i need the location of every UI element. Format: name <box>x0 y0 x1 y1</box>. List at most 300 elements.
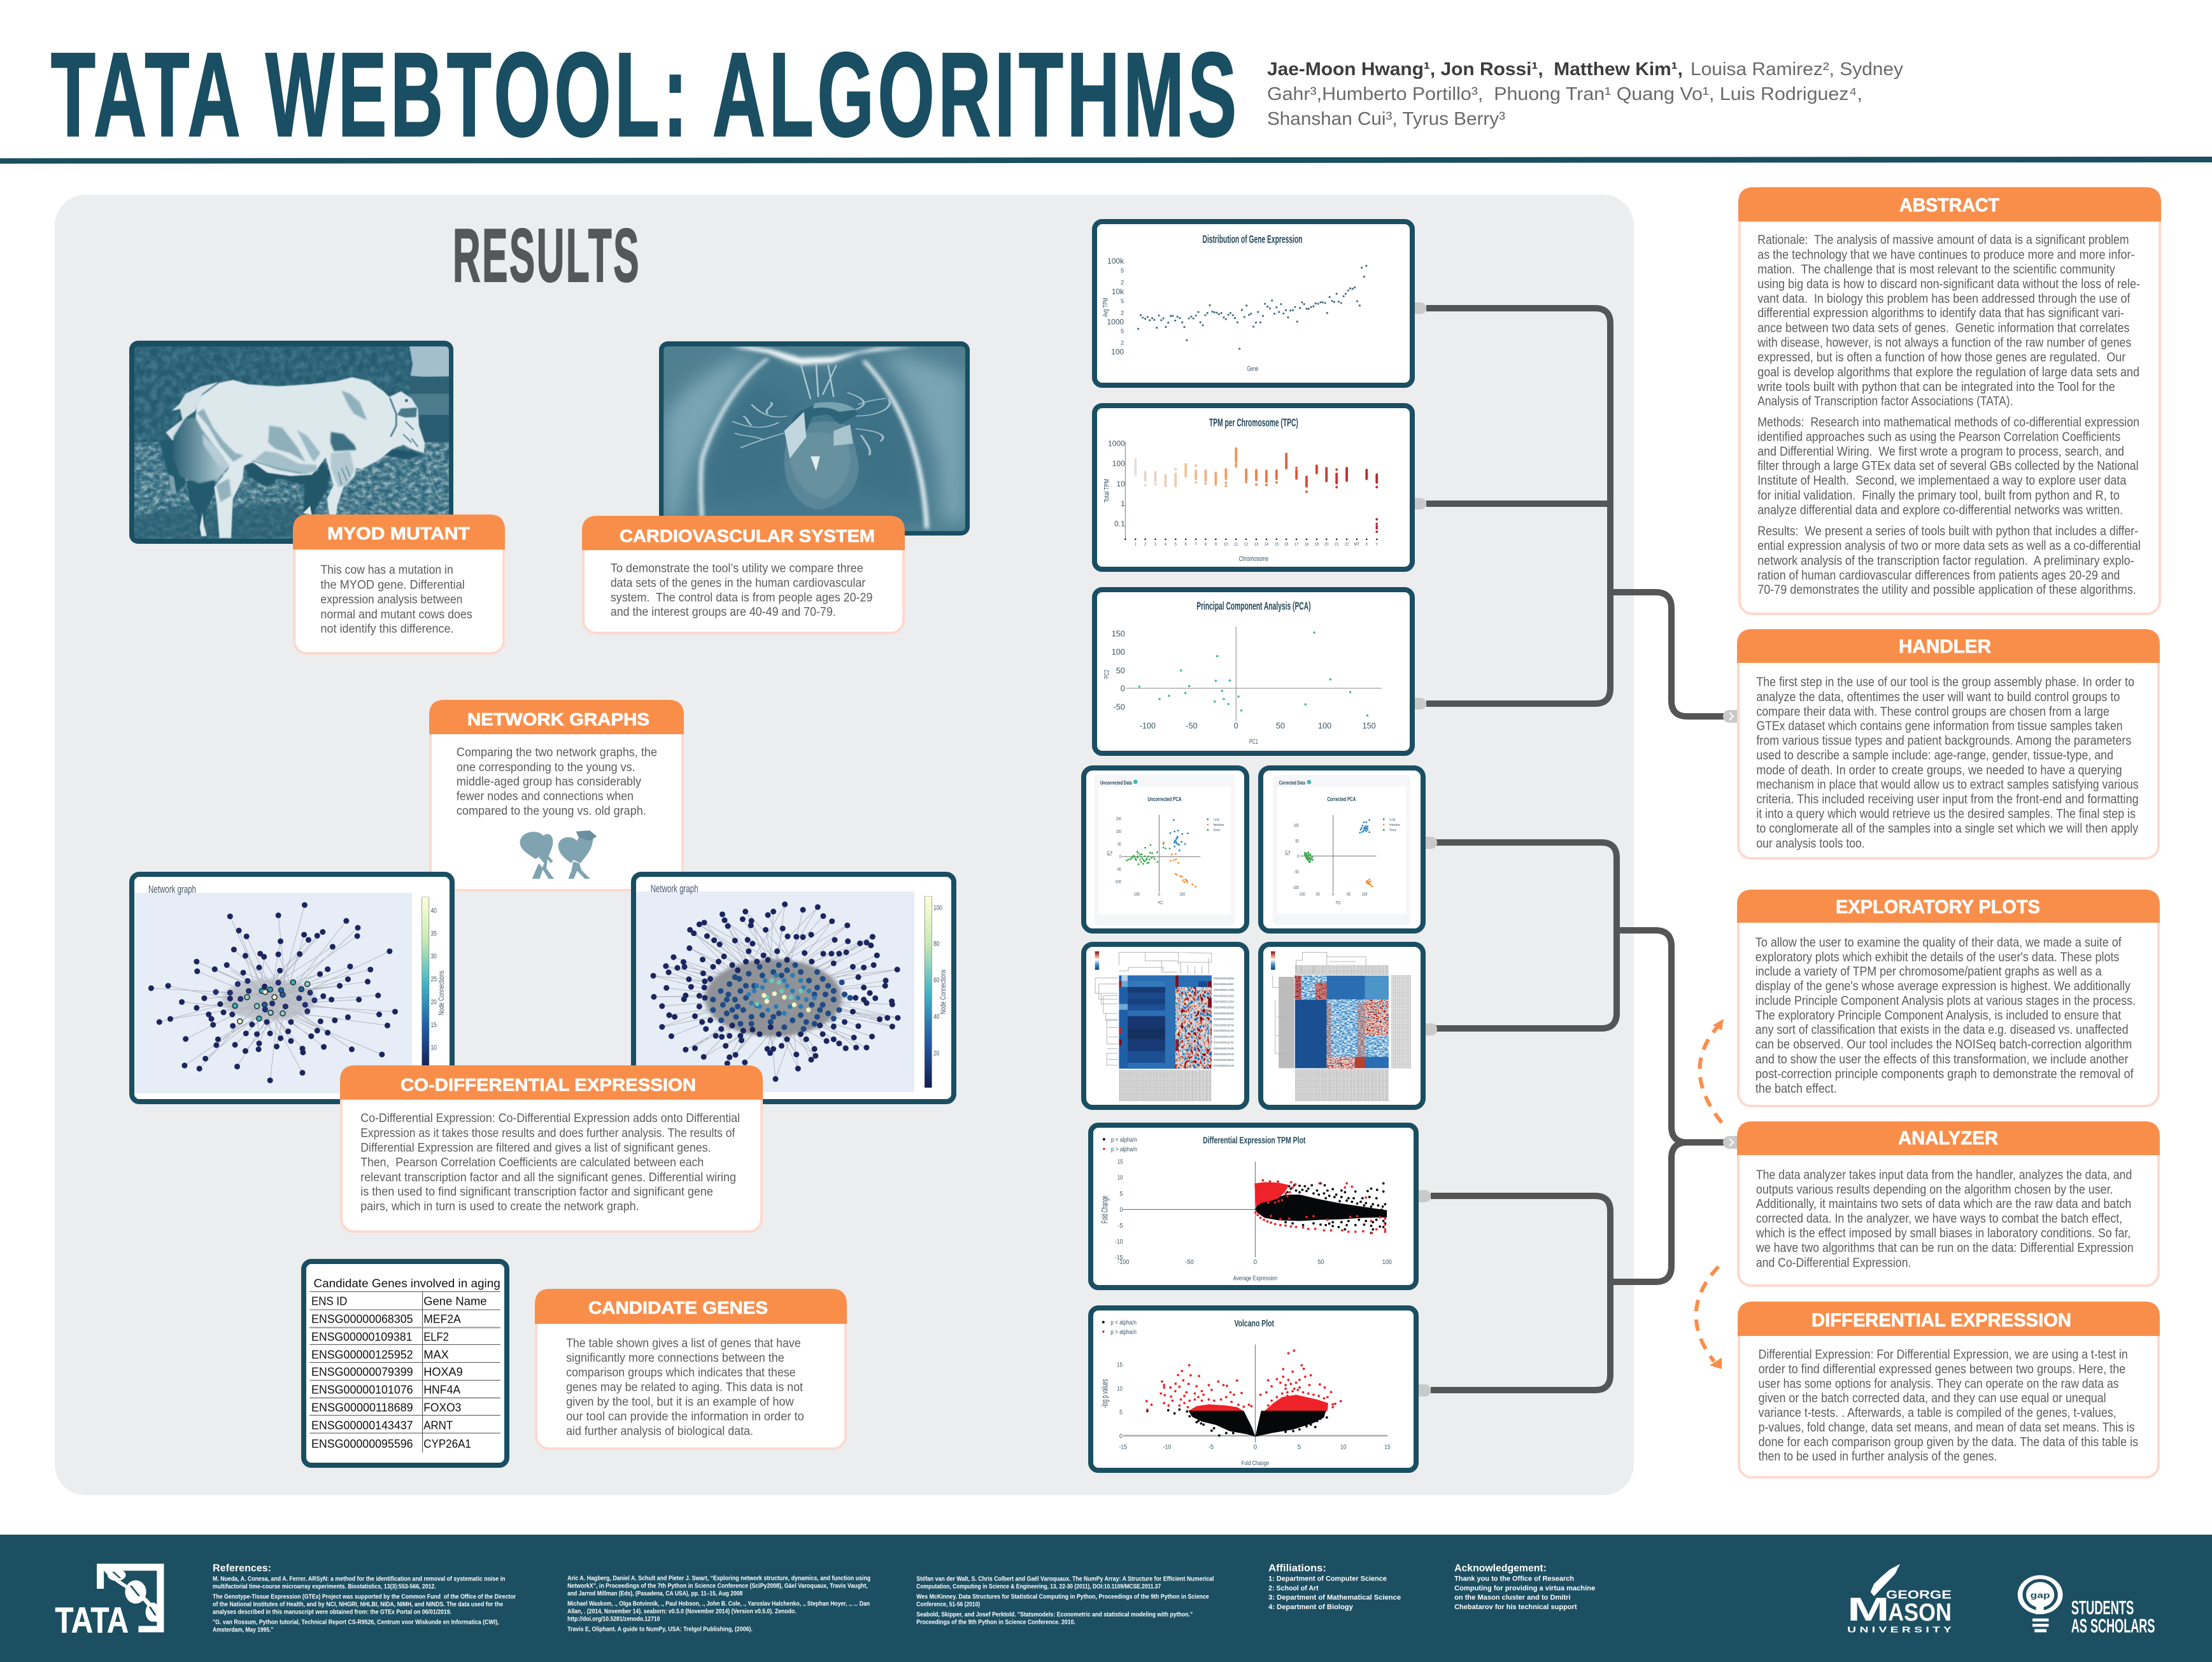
heading: cardiovascular system <box>582 516 905 550</box>
authors: Louisa Ramirez², Sydney <box>1691 59 1904 80</box>
references: The Genotype-Tissue Expression (GTEx) Project was supported by the Common Fund of the Office of the Director <box>213 1593 516 1600</box>
text: candidate genes description: significantly more connections between the <box>566 1351 784 1365</box>
text: abstract body: as the technology that we have continues to produce more and more infor- <box>1757 248 2135 262</box>
chart: tpm per chromosome: 17 <box>1294 542 1299 546</box>
text: exploratory plots body: To allow the user to examine the quality of their data, we made a suite of <box>1755 935 2122 949</box>
chart: network graph young vs middle-aged: 15 <box>430 1021 437 1029</box>
chart: uncorrected pca: PC2 <box>1106 851 1114 856</box>
chart: distribution of gene expression: 1000 <box>1107 317 1124 327</box>
text: Chebatarov for his technical support <box>1454 1603 1577 1610</box>
chart: uncorrected pca: Uncorrected Data <box>1100 780 1132 786</box>
text: the MYOD gene. Differential <box>320 578 465 591</box>
references: Aric A. Hagberg, Daniel A. Schult and Pieter J. Swart, “Exploring network structure, dynamics, and function using <box>567 1575 870 1582</box>
chart: differential expression tpm plot: p < alpha/n <box>1111 1135 1137 1143</box>
chart: corrected pca: Ovary <box>1389 828 1396 832</box>
chart: volcano plot: p < alpha/n <box>1110 1318 1137 1326</box>
references: NetworkX”, in Proceedings of the 7th Python in Science Conference (SciPy2008), Gäel Varoquaux, Travis Vaught, <box>567 1582 868 1589</box>
text: abstract body: expressed, but is often a function of how those genes are regulated. Our <box>1757 350 2126 364</box>
chart: heatmap uncorrected: ENSG00000189058 <box>1214 977 1234 981</box>
chart: network graph young vs middle-aged: Network graph <box>148 883 196 895</box>
table: candidate genes involved in aging: ENSG00000068305 <box>311 1313 413 1326</box>
chart: corrected pca: 0 <box>1297 854 1299 859</box>
text: exploratory plots body <box>1755 935 2136 1095</box>
table: candidate genes involved in aging: Gene Name <box>423 1295 487 1308</box>
text: abstract body: goal is develop algorithms that explore the regulation of large data sets and <box>1757 365 2139 379</box>
text: abstract body: Analysis of Transcription factor Associations (TATA). <box>1757 394 2013 408</box>
text: analyzer body: The data analyzer takes input data from the handler, analyzes the data, and <box>1756 1167 2132 1182</box>
text: candidate genes description <box>566 1336 804 1438</box>
chart: distribution of gene expression: 5 <box>1121 297 1124 304</box>
chart: distribution of gene expression: 10k <box>1112 287 1124 296</box>
chart: distribution of gene expression <box>1095 222 1412 385</box>
chart: corrected pca: 100 <box>1294 823 1299 828</box>
footer band <box>0 1535 2212 1662</box>
text: handler body: analyze the data, oftentimes the user will want to build control groups to <box>1756 690 2120 704</box>
table: candidate genes involved in aging: ENSG00000095596 <box>311 1438 413 1451</box>
chart: corrected pca: Lung <box>1389 818 1396 821</box>
chart: network graph young vs middle-aged <box>132 874 452 1102</box>
chart: distribution of gene expression: 100k <box>1107 257 1124 266</box>
text: abstract body: filter through a large GTEx data set of several GBs collected by the National <box>1757 458 2139 473</box>
text: abstract body: vant data. In biology this problem has been addressed through the use of <box>1757 292 2130 306</box>
text: expression analysis between <box>320 592 462 606</box>
references: Michael Waskom, ., Olga Botvinnik, ., Paul Hobson, ., John B. Cole, ., Yaroslav Halchenko, ., Stephan Hoyer, ., ... Dan <box>567 1600 870 1607</box>
chart: corrected pca: PC1 <box>1336 900 1341 906</box>
heading: cardiovascular system: CARDIOVASCULAR SYSTEM <box>620 526 875 546</box>
image: heart and lungs <box>659 341 970 536</box>
heading: analyzer: ANALYZER <box>1898 1128 1998 1149</box>
heading: abstract: ABSTRACT <box>1899 195 1999 216</box>
text: TATA <box>55 1600 129 1640</box>
chart: network graph young vs old: 80 <box>933 941 939 948</box>
text: network description: one corresponding to the young vs. <box>457 760 635 774</box>
text: analyzer body: Additionally, it maintains two sets of data which are the raw data and batch <box>1756 1197 2131 1211</box>
chart: tpm per chromosome: 2 <box>1144 542 1147 546</box>
chart: tpm per chromosome: Y <box>1375 542 1378 546</box>
chart: uncorrected pca: Ovary <box>1214 828 1221 832</box>
text: co-differential description: Expression as it takes those results and does further analysis. The results of <box>360 1126 735 1140</box>
chart: network graph young vs old: Network graph <box>651 883 698 895</box>
chart: heatmap uncorrected: ENSG00000161326 <box>1214 1030 1234 1033</box>
logo: george mason university: M <box>1847 1591 1890 1628</box>
chart: differential expression tpm plot: 15 <box>1117 1158 1123 1165</box>
text: U N I V E R S I T Y <box>1847 1624 1952 1634</box>
panel: results background <box>55 195 1634 1495</box>
text: analyzer body: which is the effect imposed by small biases in laboratory conditions. So far, <box>1755 1226 2130 1240</box>
chart: corrected pca: Corrected PCA <box>1327 795 1356 802</box>
chart: corrected pca: PC2 <box>1284 850 1292 855</box>
chart: uncorrected pca: 50 <box>1117 842 1121 847</box>
table: candidate genes involved in aging: ENSG00000118689 <box>311 1402 413 1414</box>
text: exploratory plots body: and to show the user the effects of this transformation, we include another <box>1755 1052 2129 1067</box>
text: abstract body: Results: We present a series of tools built with python that includes a differ- <box>1757 524 2138 538</box>
chart: tpm per chromosome: 1 <box>1135 542 1137 546</box>
table: candidate genes involved in aging: HNF4A <box>423 1384 460 1396</box>
text: Wes McKinney. Data Structures for Statistical Computing in Python, Proceedings of the 9th Python in Science <box>916 1593 1209 1600</box>
chart: tpm per chromosome: 12 <box>1244 542 1249 546</box>
text: co-differential description: is then used to find significant transcription factor and significant gene <box>360 1185 713 1198</box>
text: differential expression body: then to be used in further analysis of the genes. <box>1759 1449 1997 1463</box>
references: "G. van Rossum, Python tutorial, Technical Report CS-R9526, Centrum voor Wiskunde en Informatica (CWI), <box>213 1619 499 1626</box>
text: Seabold, Skipper, and Josef Perktold. "Statsmodels: Econometric and statistical modeling with python." <box>916 1611 1193 1618</box>
text: abstract body: mation. The challenge that is most relevant to the scientific community <box>1757 262 2115 276</box>
chart: tpm per chromosome: 10 <box>1224 542 1228 546</box>
text: system. The control data is from people ages 20-29 <box>611 590 872 604</box>
references: Allan, . (2014, November 14). seaborn: v0.5.0 (November 2014) (Version v0.5.0). Zenodo. <box>567 1608 797 1615</box>
panel: differential expression <box>1738 1302 2160 1477</box>
references: and Jarrod Millman (Eds), (Pasadena, CA USA), pp. 11–15, Aug 2008 <box>567 1590 742 1597</box>
logo: tata <box>55 1564 164 1640</box>
chart: heatmap uncorrected: ENSG00000211445 <box>1214 1065 1234 1068</box>
chart: volcano plot: 0 <box>1119 1432 1123 1440</box>
chart: volcano plot: 5 <box>1298 1443 1301 1451</box>
chart: heatmap uncorrected: ENSG00000166913 <box>1214 1018 1234 1021</box>
text: abstract body: differential expression algorithms to identify data that has significant vari- <box>1757 306 2124 320</box>
heading: network graphs <box>429 700 684 734</box>
arrow: analyzer to exploratory plots <box>1699 1019 1724 1123</box>
chart: uncorrected pca: PC1 <box>1158 900 1163 906</box>
text: analyzer body: and Co-Differential Expression. <box>1756 1255 1911 1270</box>
chart: principal component analysis: -50 <box>1114 702 1125 712</box>
text: This cow has a mutation in <box>320 563 453 576</box>
chart: differential expression tpm plot: -10 <box>1115 1237 1123 1245</box>
text: handler body: from various tissue types and patient backgrounds. Among the parameters <box>1756 734 2131 748</box>
chart: tpm per chromosome: 4 <box>1165 542 1167 546</box>
text: 1: Department of Computer Science <box>1268 1574 1387 1582</box>
panel: handler <box>1737 629 2160 858</box>
title: TATA WEBTOOL: ALGORITHMS <box>51 28 1240 161</box>
text: Proceedings of the 9th Python in Science Conference. 2010. <box>916 1619 1075 1626</box>
chart: heatmap uncorrected: ENSG00000184557 <box>1214 983 1234 986</box>
authors: Gahr³,Humberto Portillo³, Phuong Tran¹ Quang Vo¹, Luis Rodriguez⁴, <box>1267 84 1862 104</box>
table: candidate genes involved in aging: ENSG00000125952 <box>311 1349 413 1361</box>
text: abstract body: ance between two data sets of genes. Genetic information that correlates <box>1757 321 2129 335</box>
text: exploratory plots body: post-correction principle components graph to demonstrate the removal of <box>1755 1067 2134 1081</box>
chart: differential expression tpm plot: 50 <box>1318 1258 1324 1265</box>
chart: distribution of gene expression: 100 <box>1111 348 1124 357</box>
chart: network graph young vs middle-aged: 25 <box>430 976 437 983</box>
chart: differential expression tpm plot: 0 <box>1254 1258 1257 1265</box>
chart: differential expression tpm plot: 5 <box>1120 1190 1123 1197</box>
table: candidate genes involved in aging: CYP26A1 <box>423 1438 471 1451</box>
chart: volcano plot: 15 <box>1117 1361 1123 1368</box>
references: multifactorial time-course microarray experiments. Biostatistics, 13(3):553-566, 2012. <box>213 1583 436 1590</box>
chart: network graph young vs middle-aged: 20 <box>430 998 437 1006</box>
heading: network graphs: NETWORK GRAPHS <box>467 709 649 729</box>
heading: myod mutant <box>293 515 505 550</box>
chart: tpm per chromosome: 10 <box>1116 479 1125 488</box>
chart: uncorrected pca: 0 <box>1119 854 1121 859</box>
chart: principal component analysis: PC2 <box>1103 670 1111 679</box>
text: ASON <box>1888 1598 1952 1626</box>
chart: corrected pca: 50 <box>1295 838 1299 843</box>
references: References: <box>213 1562 271 1573</box>
text: on the Mason cluster and to Dmitri <box>1454 1593 1571 1601</box>
chart: tpm per chromosome: 8 <box>1205 542 1207 546</box>
chart: principal component analysis <box>1095 590 1412 753</box>
chart: volcano plot: 10 <box>1117 1384 1123 1392</box>
chart: heatmap uncorrected: ENSG00000129910 <box>1214 1059 1234 1062</box>
chart: distribution of gene expression: 2 <box>1121 309 1124 316</box>
chart: volcano plot: p > alpha/n <box>1110 1328 1137 1335</box>
chart: principal component analysis: 150 <box>1112 629 1125 639</box>
text: abstract body: Rationale: The analysis of massive amount of data is a significant problem <box>1757 233 2129 247</box>
text: and the interest groups are 40-49 and 70-79. <box>611 605 836 618</box>
chart: corrected pca: Corrected Data <box>1279 781 1305 786</box>
references: Conference, 51-56 (2010) <box>916 1601 980 1608</box>
chart: corrected pca: -100 <box>1299 891 1305 897</box>
chart: volcano plot: Fold Change <box>1241 1460 1269 1467</box>
heading: differential expression <box>1738 1302 2160 1336</box>
chart: heatmap uncorrected: ENSG00000011465 <box>1214 1035 1234 1039</box>
chart: tpm per chromosome: TPM per Chromosome (TPC) <box>1209 416 1298 429</box>
table: candidate genes involved in aging: ENSG00000143437 <box>311 1419 413 1432</box>
text: normal and mutant cows does <box>320 607 472 621</box>
text: network description <box>457 746 657 818</box>
affiliations: 2: School of Art <box>1268 1584 1319 1592</box>
chart: tpm per chromosome: 20 <box>1324 542 1329 546</box>
table: candidate genes involved in aging: ARNT <box>423 1419 453 1432</box>
chart: uncorrected pca: 100 <box>1179 891 1185 897</box>
image: cow photo <box>129 341 453 544</box>
references: Amsterdam, May 1995." <box>213 1626 273 1633</box>
text: exploratory plots body: exploratory plots which exhibit the details of the user's data. These plots <box>1755 949 2120 964</box>
heading: analyzer <box>1737 1121 2160 1155</box>
text: abstract body: identified approaches such as using the Pearson Correlation Coefficients <box>1757 430 2120 444</box>
chart: tpm per chromosome: 21 <box>1335 542 1339 546</box>
connectors: bracket lines from charts to handler and analyzer <box>1426 308 1724 1390</box>
chart: principal component analysis: PC1 <box>1249 738 1258 746</box>
chart: tpm per chromosome: 3 <box>1154 542 1157 546</box>
table: candidate genes involved in aging: MAX <box>423 1349 449 1361</box>
chart: tpm per chromosome: 18 <box>1305 542 1309 546</box>
text: 3: Department of Mathematical Science <box>1268 1593 1401 1601</box>
text: exploratory plots body: include a variety of TPM per chromosome/patient graphs as well as a <box>1755 964 2102 979</box>
chart: differential expression tpm plot: Differential Expression TPM Plot <box>1203 1135 1305 1146</box>
text: handler body: The first step in the use of our tool is the group assembly phase. In order to <box>1756 675 2134 689</box>
chart: tpm per chromosome: 1 <box>1121 499 1125 508</box>
heading: results: RESULTS <box>453 213 641 298</box>
chart: network graph young vs middle-aged: 35 <box>430 930 437 937</box>
chart: network graph young vs middle-aged: 10 <box>430 1044 437 1051</box>
text: abstract body <box>1757 233 2141 597</box>
text: Computing for providing a virtua machine <box>1454 1584 1595 1592</box>
text: handler body: to conglomerate all of the samples into a single set which we will then apply <box>1756 821 2139 835</box>
text: handler body: used to describe a sample include: age-range, gender, tissue-type, and <box>1756 748 2113 762</box>
text: Thank you to the Office of Research <box>1454 1574 1574 1582</box>
table: candidate genes involved in aging: ENSG00000101076 <box>311 1384 413 1396</box>
icon: two heart characters <box>520 830 597 879</box>
heading: co-differential expression <box>340 1065 763 1100</box>
chart: differential expression tpm plot: 0 <box>1120 1206 1123 1214</box>
panel: myod mutant <box>293 515 505 653</box>
chart: volcano plot: 5 <box>1119 1409 1123 1416</box>
chart: corrected pca: Intestine <box>1389 823 1400 827</box>
text: co-differential description <box>360 1112 740 1213</box>
chart: heatmap uncorrected: ENSG00000117906 <box>1214 989 1234 992</box>
text: exploratory plots body: the batch effect. <box>1755 1081 1837 1095</box>
panel: abstract <box>1738 187 2161 614</box>
text: myod description <box>320 563 472 636</box>
chart: differential expression tpm plot: 100 <box>1382 1258 1392 1265</box>
text: candidate genes description: comparison groups which indicates that these <box>566 1365 796 1379</box>
chart: heatmap uncorrected: ENSG00000114520 <box>1214 995 1234 998</box>
heading: myod mutant: MYOD MUTANT <box>327 523 470 543</box>
text: exploratory plots body: can be observed. Our tool includes the NOISeq batch-correction algorithm <box>1755 1037 2132 1051</box>
authors: Shanshan Cui³, Tyrus Berry³ <box>1267 109 1505 129</box>
text: handler body: criteria. This included receiving user input from the front-end and formatting <box>1756 792 2139 806</box>
chart: distribution of gene expression: 2 <box>1121 279 1124 286</box>
chart: network graph young vs old: 60 <box>933 977 939 984</box>
chart: uncorrected pca: 100 <box>1116 829 1121 834</box>
chart: volcano plot: -5 <box>1209 1443 1214 1451</box>
panel: co-differential expression <box>340 1065 763 1232</box>
chart: corrected pca <box>1261 768 1423 931</box>
logo: students as scholars: gap <box>2031 1590 2050 1600</box>
chart: heatmap uncorrected: ENSG00000135480 <box>1214 1048 1234 1051</box>
chart: network graph young vs old: 40 <box>933 1013 939 1021</box>
table: candidate genes involved in aging: HOXA9 <box>423 1366 463 1379</box>
heading: co-differential expression: CO-DIFFERENTIAL EXPRESSION <box>401 1075 696 1095</box>
table: candidate genes involved in aging <box>304 1261 507 1465</box>
text: network description: Comparing the two network graphs, the <box>457 746 657 759</box>
text: differential expression body: p-values, fold change, data set means, and mean of data set means. This is <box>1759 1420 2135 1434</box>
chart: tpm per chromosome: Total TPM <box>1103 479 1111 502</box>
chart: distribution of gene expression: Distribution of Gene Expression <box>1203 232 1302 246</box>
text: handler body: mode of death. In order to create groups, we needed to have a querying <box>1756 763 2122 778</box>
chart: differential expression tpm plot <box>1091 1125 1416 1288</box>
chart: tpm per chromosome: MT <box>1354 542 1360 546</box>
chart: corrected pca: -50 <box>1315 891 1320 897</box>
chart: differential expression tpm plot: Fold Change <box>1100 1195 1110 1223</box>
chart: tpm per chromosome: 19 <box>1315 542 1319 546</box>
text: network description: middle-aged group has considerably <box>457 775 641 788</box>
table: candidate genes involved in aging: ENSG00000109381 <box>311 1331 412 1344</box>
connector stubs <box>1407 302 1742 1396</box>
text: co-differential description: Co-Differential Expression: Co-Differential Expression adds onto Differential <box>360 1112 740 1125</box>
chart: principal component analysis: 100 <box>1318 721 1331 730</box>
panel: analyzer <box>1737 1121 2160 1286</box>
text: abstract body: analyze differential data and explore co-differential networks was written. <box>1757 503 2123 517</box>
chart: uncorrected pca: -100 <box>1133 891 1140 897</box>
references: analyses described in this manuscript were obtained from: the GTEx Portal on 06/01/2019. <box>213 1609 451 1616</box>
text: differential expression body: Differential Expression: For Differential Expression, we are using a t-test in <box>1759 1347 2128 1361</box>
chart: principal component analysis: 50 <box>1276 721 1285 730</box>
chart: volcano plot: 0 <box>1254 1443 1257 1451</box>
chart: tpm per chromosome: 6 <box>1185 542 1187 546</box>
text: abstract body: Methods: Research into mathematical methods of co-differential expression <box>1757 415 2139 429</box>
chart: uncorrected pca: -100 <box>1114 879 1121 884</box>
text: analyzer body: we have two algorithms that can be run on the data: Differential Expression <box>1755 1240 2134 1254</box>
chart: uncorrected pca: -50 <box>1117 867 1121 872</box>
table: candidate genes involved in aging: FOXO3 <box>423 1402 461 1414</box>
heading: handler <box>1737 629 2160 663</box>
chart: network graph young vs old: 100 <box>933 904 942 912</box>
panel: candidate genes <box>535 1289 847 1449</box>
chart: distribution of gene expression: 5 <box>1121 267 1124 274</box>
panel: cardiovascular system <box>582 516 905 633</box>
chart: principal component analysis: 100 <box>1112 647 1125 657</box>
text: handler body: GTEx dataset which contains gene information from tissue samples taken <box>1756 719 2123 733</box>
text: abstract body: network analysis of the transcription factor regulation. A preliminary explo- <box>1757 553 2134 568</box>
text: abstract body: ration of human cardiovascular differences from patients ages 20-29 and <box>1757 568 2120 583</box>
chart: corrected pca: 100 <box>1362 891 1367 897</box>
text: differential expression body: variance t-tests. . Afterwards, a table is compiled of the genes, t-values, <box>1759 1405 2116 1420</box>
authors: Jae-Moon Hwang¹, Jon Rossi¹, Matthew Kim¹, <box>1267 59 1683 80</box>
panel: myod mutant: not identify this difference. <box>320 621 454 636</box>
text: handler body: it into a query which would retrieve us the desired samples. The final step is <box>1756 807 2136 821</box>
chart: tpm per chromosome: 13 <box>1254 542 1259 546</box>
chart: corrected pca: -50 <box>1294 869 1299 874</box>
chart: volcano plot: -log p values <box>1100 1379 1110 1408</box>
heading: candidate genes <box>535 1289 847 1324</box>
heading: abstract <box>1738 187 2161 222</box>
logo: george mason university <box>1847 1564 1952 1634</box>
chart: volcano plot <box>1091 1308 1416 1470</box>
affiliations: Affiliations: <box>1268 1562 1326 1573</box>
text: analyzer body: corrected data. In the analyzer, we have ways to combat the batch effect, <box>1756 1211 2122 1226</box>
chart: corrected pca: 50 <box>1347 891 1351 897</box>
text: abstract body: and Differential Wiring. We first wrote a program to process, search, and <box>1757 444 2124 458</box>
chart: differential expression tpm plot: -50 <box>1185 1258 1194 1265</box>
text: candidate genes description: our tool can provide the information in order to <box>566 1409 804 1423</box>
table: candidate genes involved in aging: ENS ID <box>311 1295 347 1308</box>
heading: differential expression: DIFFERENTIAL EXPRESSION <box>1811 1310 2071 1331</box>
text: abstract body: for initial validation. Finally the primary tool, built from python and R, to <box>1757 488 2120 502</box>
chart: volcano plot: -10 <box>1163 1443 1171 1451</box>
chart: distribution of gene expression: 5 <box>1121 327 1124 334</box>
arrow: analyzer to differential expression <box>1696 1267 1722 1369</box>
chart: corrected pca: -100 <box>1293 885 1299 890</box>
chart: uncorrected pca: Lung <box>1214 818 1219 821</box>
text: differential expression body <box>1759 1347 2138 1463</box>
chart: uncorrected pca: 0 <box>1158 891 1160 897</box>
chart: heatmap uncorrected <box>1084 944 1247 1107</box>
chart: principal component analysis: 50 <box>1116 665 1125 675</box>
text: network description: compared to the young vs. old graph. <box>457 804 646 818</box>
chart: heatmap uncorrected: ENSG00000111341 <box>1214 1042 1234 1044</box>
chart: uncorrected pca: Intestine <box>1214 823 1224 827</box>
text: Computation, Computing in Science & Engineering, 13, 22-30 (2011), DOI:10.1109/MCSE.2011.37 <box>916 1583 1161 1590</box>
chart: principal component analysis: -100 <box>1140 721 1156 730</box>
chart: volcano plot: Volcano Plot <box>1234 1318 1274 1328</box>
panel: exploratory plots <box>1737 890 2160 1106</box>
text: 4: Department of Biology <box>1268 1603 1353 1610</box>
chart: network graph young vs middle-aged: 40 <box>430 907 437 915</box>
heading: candidate genes: CANDIDATE GENES <box>588 1298 768 1318</box>
chart: tpm per chromosome: 9 <box>1215 542 1217 546</box>
chart: volcano plot: 10 <box>1340 1443 1347 1451</box>
text: handler body <box>1756 675 2139 851</box>
logo: students as scholars <box>2018 1575 2155 1637</box>
chart: tpm per chromosome: 5 <box>1175 542 1177 546</box>
chart: principal component analysis: -50 <box>1186 721 1198 730</box>
text: data sets of the genes in the human cardiovascular <box>611 576 865 590</box>
authors <box>1267 59 1904 129</box>
chart: differential expression tpm plot: -100 <box>1117 1258 1129 1265</box>
chart: tpm per chromosome: 22 <box>1345 542 1349 546</box>
chart: principal component analysis: 150 <box>1363 721 1376 730</box>
table: candidate genes involved in aging: ELF2 <box>423 1331 449 1344</box>
text: GEORGE <box>1886 1588 1952 1602</box>
chart: heatmap uncorrected: ENSG00000100129 <box>1214 1053 1234 1056</box>
chart: tpm per chromosome: X <box>1365 542 1368 546</box>
chart: uncorrected pca: Uncorrected PCA <box>1147 795 1182 802</box>
chart: distribution of gene expression: 2 <box>1121 339 1124 346</box>
chart: tpm per chromosome: 100 <box>1112 459 1125 468</box>
chart: volcano plot: -15 <box>1119 1443 1127 1451</box>
chart: tpm per chromosome: 14 <box>1265 542 1269 546</box>
